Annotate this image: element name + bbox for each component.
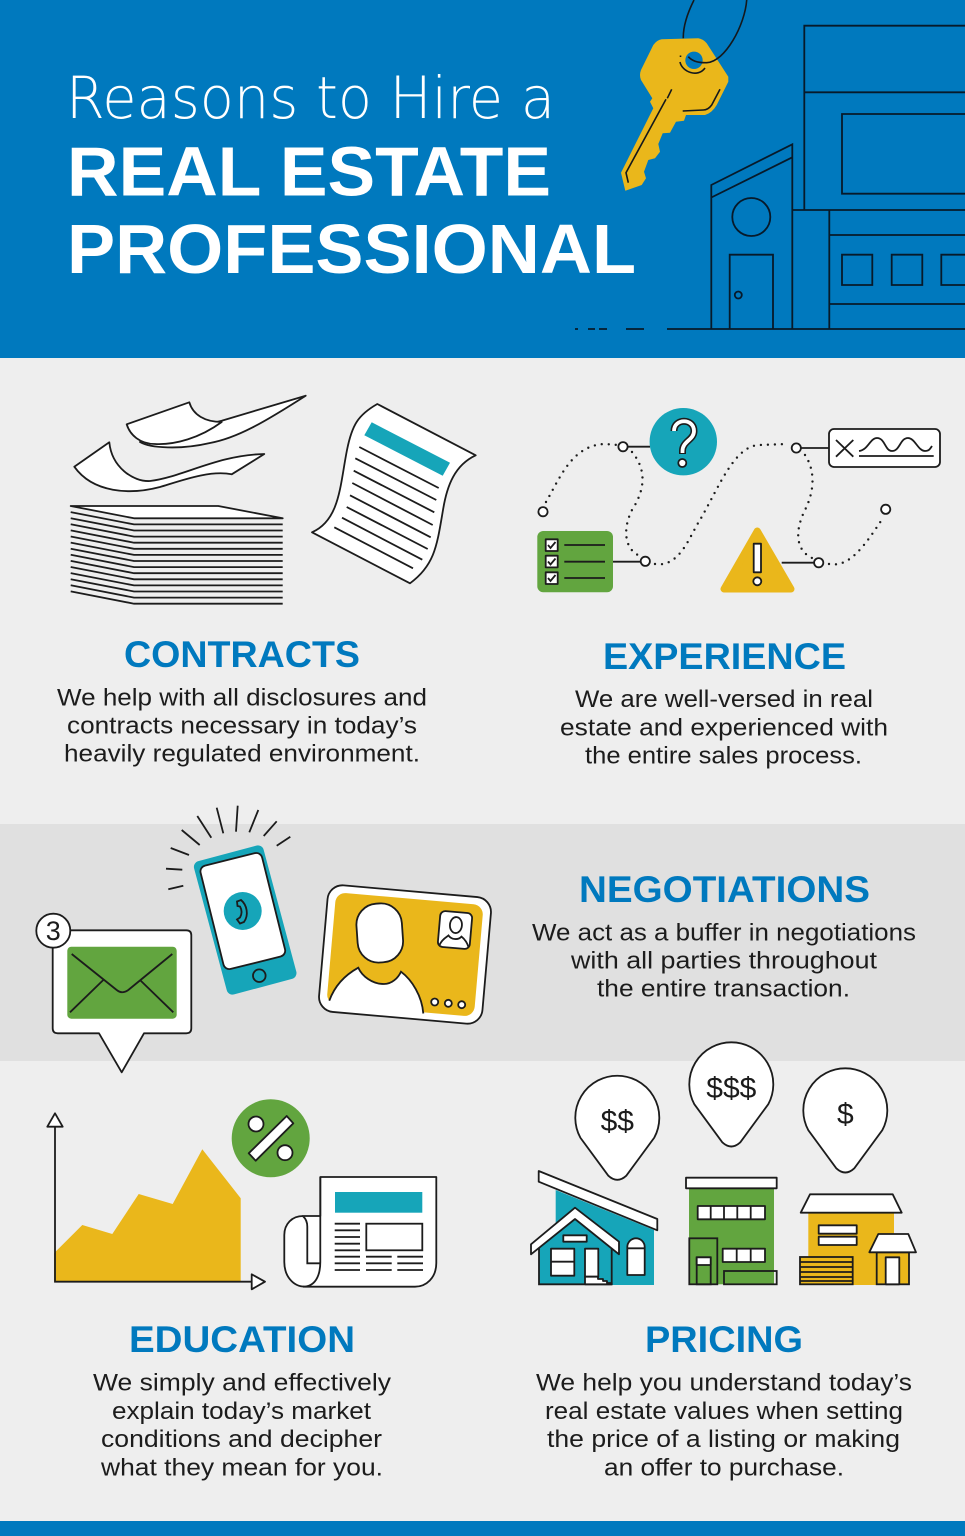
footer bar (0, 1521, 965, 1536)
text: education description: what they mean for you. (100, 1454, 383, 1482)
panel: education (47, 1099, 436, 1482)
icon: house with $$ pin (531, 1076, 659, 1285)
icon: checklist (537, 531, 613, 592)
text: education description: We simply and effectively (93, 1370, 392, 1396)
title: PROFESSIONAL (67, 210, 636, 288)
text: contracts description: heavily regulated environment. (64, 740, 420, 768)
icon: key (621, 0, 747, 191)
icon: ringing smartphone (166, 806, 298, 996)
icon: curled document (312, 404, 476, 583)
text: pricing description: an offer to purchase. (604, 1454, 844, 1482)
text: negotiations description: the entire transaction. (597, 976, 850, 1002)
icon: apartment building with $$$ pin: $$$ (706, 1072, 757, 1105)
text: experience description: estate and experienced with (560, 714, 888, 742)
icon: apartment building with $$$ pin (686, 1042, 777, 1284)
heading: contracts: CONTRACTS (124, 634, 360, 675)
text: pricing description: We help you understand today’s (536, 1370, 912, 1396)
heading: pricing: PRICING (645, 1319, 803, 1360)
text: experience description (560, 686, 888, 770)
chart: rising area chart (47, 1113, 265, 1289)
heading: education: EDUCATION (129, 1319, 355, 1360)
panel: header banner (0, 0, 965, 358)
panel: experience (537, 408, 940, 770)
text: pricing description (536, 1370, 912, 1482)
text: education description: explain today’s market (112, 1398, 371, 1425)
title: Reasons to Hire a (66, 64, 555, 132)
icon: video call tablet (318, 884, 492, 1025)
icon: question mark circle (650, 408, 717, 475)
panel: contracts (57, 396, 476, 768)
text: pricing description: the price of a listing or making (547, 1426, 900, 1453)
icon: message bubble with envelope (36, 914, 191, 1072)
text: negotiations description: We act as a buffer in negotiations (532, 920, 916, 946)
icon: message bubble with envelope: 3 (46, 916, 61, 946)
text: experience description: the entire sales process. (585, 742, 862, 770)
heading: experience: EXPERIENCE (603, 636, 846, 677)
title (66, 64, 636, 288)
icon: warning triangle (724, 531, 791, 589)
text: negotiations description (532, 920, 916, 1002)
text: education description (93, 1370, 392, 1482)
title: REAL ESTATE (67, 132, 551, 210)
icon: paper stack and flying sheets (71, 396, 306, 604)
text: negotiations description: with all parties throughout (570, 948, 877, 974)
panel: pricing (531, 1042, 916, 1482)
panel: negotiations (36, 806, 916, 1072)
icon: house with $ pin: $ (837, 1098, 854, 1131)
text: pricing description: real estate values when setting (545, 1398, 903, 1425)
icon: percent badge (232, 1099, 310, 1177)
heading: negotiations: NEGOTIATIONS (579, 869, 870, 910)
icon: buildings line art (575, 26, 965, 329)
icon: house with $$ pin: $$ (601, 1105, 634, 1138)
icon: dotted path with milestones (537, 408, 940, 592)
text: contracts description: We help with all disclosures and (57, 684, 427, 712)
text: education description: conditions and decipher (101, 1426, 382, 1453)
icon: house with $ pin (800, 1068, 916, 1285)
text: experience description: We are well-versed in real (575, 686, 873, 713)
text: contracts description: contracts necessary in today’s (67, 712, 417, 740)
icon: signature box (829, 429, 940, 467)
icon: newspaper (284, 1177, 436, 1287)
text: contracts description (57, 684, 427, 768)
